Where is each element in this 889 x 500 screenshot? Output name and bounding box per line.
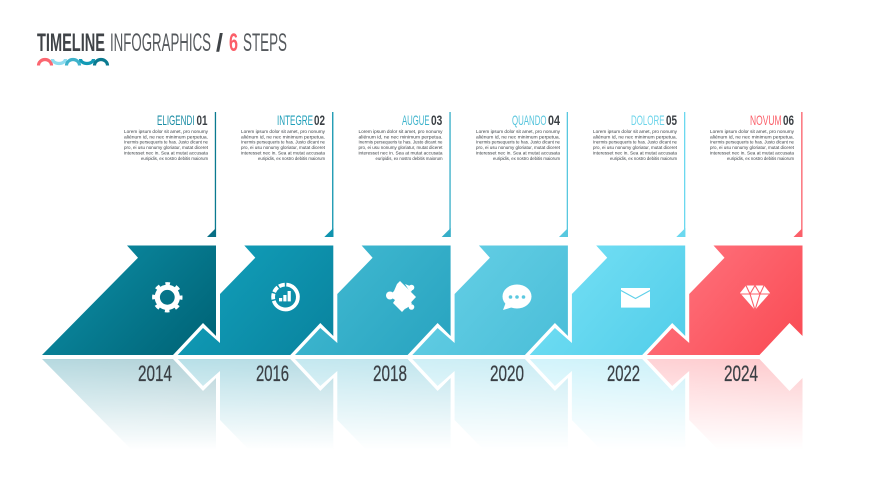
panel: step 6 text: interesset nec in. Sea at mutat accusata: [710, 151, 794, 156]
icon: diamond: [739, 286, 771, 310]
title: STEPS: [243, 29, 287, 57]
panel: step 5 text: Lorem ipsum dolor sit amet, pro nonumy: [593, 129, 678, 134]
panel: step 2 text: Inermis persequeris te has. Justo dicant ne: [241, 140, 325, 145]
panel: step 1 text: Lorem ipsum dolor sit amet, pro nonumy: [124, 129, 209, 134]
panel: step 6 text: euripidis, ex nostro debitis maiorum: [727, 156, 794, 161]
panel: step 5 text: Inermis persequeris te has. Justo dicant ne: [593, 140, 677, 145]
panel: step 6 text: Inermis persequeris te has. Justo dicant ne: [710, 140, 794, 145]
panel: step 1 text: Inermis persequeris te has. Justo dicant ne: [124, 140, 208, 145]
decorative wave under title: [38, 59, 108, 66]
icon: donut chart: [271, 283, 300, 311]
reflection of arrows: [42, 359, 802, 440]
panel: step 4 text: pro, ei usu nonumy gloriatur, mutat diceret: [476, 145, 561, 150]
year labels: 2016: [256, 361, 289, 386]
panel: step 4 text: 04: [548, 112, 560, 128]
panel: step 4 text: QUANDO: [512, 112, 547, 128]
icon: gear: [154, 284, 181, 311]
panel: step 1 text: interesset nec in. Sea at mutat accusata: [124, 151, 208, 156]
panel: step 5 text: [593, 112, 685, 237]
title: TIMELINE: [37, 29, 105, 57]
title: [37, 29, 287, 57]
panel: step 2 text: INTEGRE: [277, 112, 313, 128]
panel: step 4 text: Lorem ipsum dolor sit amet, pro nonumy: [476, 129, 561, 134]
panel: step 2 text: [241, 112, 333, 237]
arrow: step 2: [178, 246, 333, 355]
panel: step 1 text: ELIGENDI: [157, 112, 194, 128]
year labels: 2020: [490, 361, 524, 386]
panel: step 5 text: 05: [666, 112, 677, 128]
panel: step 2 text: aliénum id, ne nec minimum perpetua.: [241, 134, 325, 139]
panel: step 3 text: aliénum id, ne nec minimum perpetua.: [358, 134, 442, 139]
icon: speech bubble: [502, 284, 532, 310]
panel: step 3 text: euripidis, ex nostro debitis maiorum: [376, 156, 443, 161]
panel: step 3 text: Inermis persequeris te has. Justo dicant ne: [358, 140, 443, 145]
year labels: 2022: [607, 361, 640, 386]
title: 6: [229, 29, 238, 57]
panel: step 3 text: 03: [431, 112, 442, 128]
panel: step 5 text: interesset nec in. Sea at mutat accusata: [593, 151, 677, 156]
panel: step 5 text: pro, ei usu nonumy gloriatur, mutat diceret: [593, 145, 678, 150]
year labels: [138, 361, 758, 386]
panel: step 4 text: [476, 112, 568, 237]
panel: step 2 text: 02: [314, 112, 325, 128]
arrow: step 4: [412, 246, 568, 355]
panel: step 4 text: euripidis, ex nostro debitis maiorum: [493, 156, 560, 161]
panel: step 3 text: interesset nec in. Sea at mutat accusata: [358, 151, 443, 156]
panel: step 6 text: pro, ei usu nonumy gloriatur, mutat diceret: [710, 145, 795, 150]
panel: step 2 text: interesset nec in. Sea at mutat accusata: [241, 151, 325, 156]
panel: step 6 text: aliénum id, ne nec minimum perpetua.: [710, 134, 794, 139]
panel: step 3 text: pro, ei usu nonumy gloriatur, mutat diceret: [358, 145, 443, 150]
panel: step 4 text: interesset nec in. Sea at mutat accusata: [476, 151, 560, 156]
panel: step 5 text: aliénum id, ne nec minimum perpetua.: [593, 134, 677, 139]
panel: step 3 text: [358, 112, 451, 237]
panel: step 6 text: Lorem ipsum dolor sit amet, pro nonumy: [710, 129, 795, 134]
year labels: 2014: [138, 361, 172, 386]
panel: step 5 text: DOLORE: [631, 112, 664, 128]
panel: step 2 text: Lorem ipsum dolor sit amet, pro nonumy: [241, 129, 326, 134]
panel: step 3 text: AUGUE: [402, 112, 430, 128]
panel: step 1 text: aliénum id, ne nec minimum perpetua.: [124, 134, 208, 139]
panel: step 6 text: 06: [783, 112, 794, 128]
arrow: step 6: [647, 246, 802, 355]
panel: step 6 text: NOVUM: [750, 112, 782, 128]
panel: step 1 text: [124, 112, 216, 237]
arrow: step 3: [295, 246, 451, 355]
arrow: step 1: [42, 246, 216, 355]
panel: step 5 text: euripidis, ex nostro debitis maiorum: [610, 156, 677, 161]
panel: step 3 text: Lorem ipsum dolor sit amet, pro nonumy: [358, 129, 443, 134]
panel: step 4 text: aliénum id, ne nec minimum perpetua.: [476, 134, 560, 139]
panel: step 1 text: pro, ei usu nonumy gloriatur, mutat diceret: [124, 145, 209, 150]
year labels: 2024: [724, 361, 758, 386]
panel: step 2 text: pro, ei usu nonumy gloriatur, mutat diceret: [241, 145, 326, 150]
panel: step 4 text: Inermis persequeris te has. Justo dicant ne: [476, 140, 560, 145]
panel: step 1 text: 01: [196, 112, 208, 128]
panel: step 2 text: euripidis, ex nostro debitis maiorum: [258, 156, 325, 161]
panel: step 6 text: [710, 112, 802, 237]
icon: envelope: [621, 288, 650, 308]
title: /: [216, 29, 223, 57]
arrow: step 5: [530, 246, 685, 355]
year labels: 2018: [373, 361, 407, 386]
title: INFOGRAPHICS: [110, 29, 211, 57]
panel: step 1 text: euripidis, ex nostro debitis maiorum: [141, 156, 208, 161]
icon: puzzle piece: [386, 281, 416, 312]
